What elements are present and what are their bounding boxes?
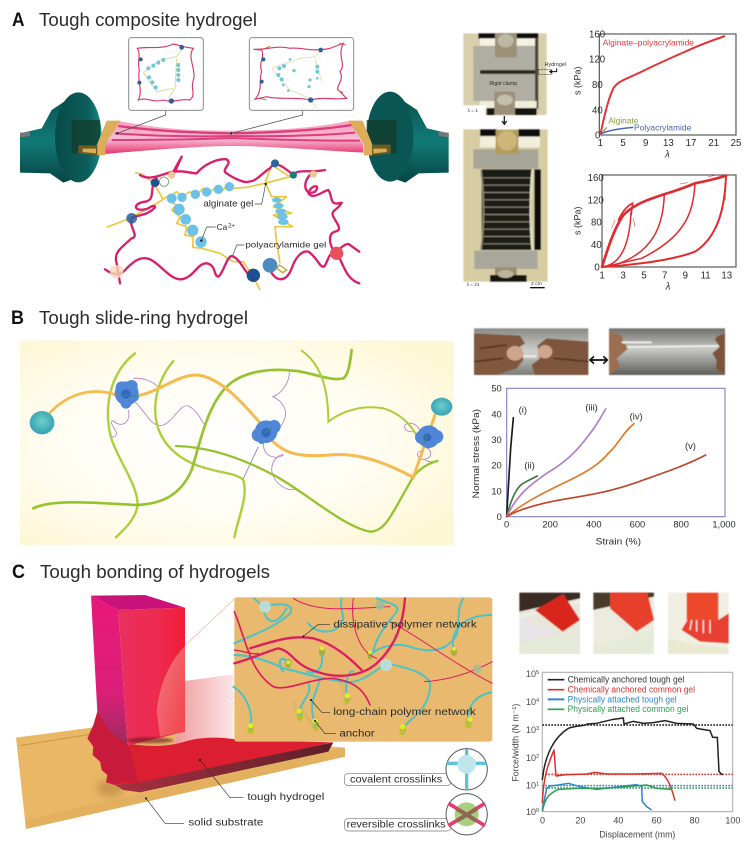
- axes labels: [572, 173, 732, 292]
- axes labels: 1,000: [712, 519, 736, 529]
- axes labels: Normal stress (kPa): [471, 409, 481, 498]
- axes labels: 10: [491, 486, 502, 496]
- thin purple chains: [109, 371, 437, 490]
- chart: force per width vs displacement: [510, 669, 740, 839]
- dotted plateau lines: [542, 725, 733, 788]
- curves: [507, 409, 706, 517]
- axes labels: 21: [708, 138, 719, 149]
- covalent crosslink blobs: [259, 600, 482, 674]
- label: long-chain polymer network: long-chain polymer network: [333, 707, 476, 718]
- sliding rings: [115, 380, 443, 448]
- label: polyacrylamide gel: polyacrylamide gel: [245, 239, 326, 249]
- axes labels: 5: [620, 138, 626, 149]
- label: anchor: [314, 720, 375, 739]
- axes labels: 80: [690, 816, 700, 826]
- axes labels: 120: [588, 195, 604, 206]
- heading: tough bonding of hydrogels: Tough bonding of hydrogels: [40, 561, 270, 582]
- icon: left grip: [20, 92, 102, 183]
- axes labels: 50: [491, 384, 502, 394]
- photo: stretched gel lambda=21: 2 cm: [531, 281, 542, 287]
- green polymer network: [33, 350, 437, 537]
- label: Ca2+: Ca: [217, 222, 228, 232]
- legend: covalent crosslinks: covalent crosslinks: [350, 775, 442, 786]
- arrow down: [502, 116, 507, 124]
- axes labels: 0: [594, 262, 600, 273]
- chart: stress vs stretch: [572, 30, 741, 160]
- axes labels: 2: [536, 754, 539, 760]
- chart: normal stress vs strain: [471, 384, 736, 546]
- label: alginate gel: [203, 183, 267, 209]
- axes labels: 30: [491, 435, 502, 445]
- axes labels: 20: [575, 816, 585, 826]
- legend: Physically attached tough gel: [568, 694, 677, 704]
- label: Ca2+: 2+: [228, 223, 235, 229]
- photo: stretched gel lambda=21: [463, 129, 548, 288]
- curve labels: (i): [519, 405, 527, 415]
- axes labels: 1: [598, 138, 603, 149]
- axes labels: 5: [641, 270, 647, 281]
- axes labels: 13: [663, 138, 674, 149]
- axes labels: 10: [526, 697, 536, 707]
- callouts and crosslink legends: [145, 749, 487, 835]
- end stoppers: [30, 398, 452, 434]
- axes labels: 9: [643, 138, 648, 149]
- axes labels: [471, 384, 736, 546]
- legend: Chemically anchored common gel: [568, 684, 695, 694]
- axes labels: 10: [526, 807, 536, 817]
- axes labels: 1: [536, 782, 539, 788]
- photo: unstretched gel lambda=1: [463, 33, 566, 115]
- photo: peel stage a: [519, 593, 580, 654]
- anchors: [247, 647, 472, 735]
- stretch photos: [471, 328, 736, 546]
- axes labels: 0: [540, 816, 545, 826]
- label: solid substrate: [145, 797, 264, 829]
- axes labels: 13: [721, 270, 732, 281]
- chart: stress vs stretch: Alginate–polyacrylamide: [603, 37, 694, 47]
- label: tough hydrogel: [199, 759, 324, 803]
- inset: stretched network: [249, 38, 354, 110]
- axes labels: 800: [673, 519, 689, 529]
- axes labels: 600: [630, 519, 645, 529]
- heading letter B: B: [11, 308, 24, 329]
- axes labels: s (kPa): [572, 67, 582, 95]
- panel: A tough composite hydrogel: [12, 9, 741, 292]
- axes labels: λ: [665, 281, 671, 292]
- axes labels: Strain (%): [596, 536, 641, 546]
- photo: stretched gel: [609, 328, 725, 375]
- axes labels: [572, 30, 741, 160]
- axes labels: 40: [592, 105, 603, 116]
- peeling illustration: [16, 595, 345, 829]
- panel: B tough slide-ring hydrogel: [11, 307, 736, 546]
- tough hydrogel layer on substrate: [100, 732, 333, 792]
- axes labels: 0: [536, 808, 539, 814]
- axes labels: 3: [536, 726, 539, 732]
- label: anchor: anchor: [339, 728, 375, 739]
- axes labels: 10: [526, 725, 536, 735]
- calcium ions: [167, 182, 289, 248]
- axes labels: 10: [526, 781, 536, 791]
- photo: unstretched gel lambda=1: Hydrogel: [545, 62, 566, 68]
- axes labels: 80: [592, 80, 603, 91]
- legend: reversible crosslinks: [344, 794, 487, 835]
- photo: peel stage c: [668, 593, 729, 654]
- photos: tensile test: [463, 30, 741, 292]
- axes labels: 4: [536, 698, 539, 704]
- heading letter C: C: [12, 562, 25, 583]
- axes labels: 5: [536, 670, 539, 676]
- stretching illustration: [20, 38, 449, 183]
- curve labels: (ii): [524, 461, 535, 471]
- curve labels: (v): [685, 441, 696, 451]
- axes labels: 160: [588, 173, 604, 184]
- photo: peel stage b: [593, 593, 654, 654]
- axes labels: 40: [613, 816, 623, 826]
- legend: reversible crosslinks: reversible crosslinks: [347, 820, 446, 831]
- curve labels: (iii): [585, 402, 598, 412]
- axes labels: 9: [683, 270, 688, 281]
- chart: stress vs stretch: Alginate: [608, 115, 639, 125]
- axes labels: s (kPa): [572, 207, 582, 235]
- icon: right grip: [367, 92, 449, 183]
- network diagram: [105, 157, 359, 290]
- axes labels: 400: [586, 519, 602, 529]
- axes labels: 10: [526, 753, 536, 763]
- axes labels: 40: [591, 240, 602, 251]
- curve labels: [519, 402, 696, 471]
- label: tough hydrogel: tough hydrogel: [247, 792, 324, 803]
- axes labels: 1: [599, 270, 605, 281]
- panel: C tough bonding of hydrogels: [12, 561, 740, 839]
- axes labels: 3: [620, 270, 626, 281]
- axes labels: 80: [591, 218, 602, 229]
- axes labels: 0: [497, 512, 502, 522]
- legend: covalent crosslinks: [344, 749, 487, 790]
- orange axle chain: [49, 375, 435, 477]
- legend: Chemically anchored tough gel: [568, 674, 684, 684]
- axes labels: λ: [664, 149, 670, 160]
- heading: tough composite hydrogel: Tough composite hydrogel: [39, 9, 257, 30]
- heading letter A: A: [12, 10, 25, 31]
- legend: Physically attached common gel: [568, 704, 688, 714]
- solid substrate: [16, 728, 345, 829]
- inset: unstretched network: [129, 38, 203, 110]
- heading: tough slide-ring hydrogel: Tough slide-ring hydrogel: [39, 307, 248, 328]
- anchor heads: [248, 646, 473, 729]
- axes labels: 160: [589, 30, 605, 41]
- background: [20, 341, 454, 545]
- label: dissipative polymer network: dissipative polymer network: [333, 620, 477, 631]
- contact shadow: [127, 737, 173, 743]
- axes labels: 20: [491, 461, 502, 471]
- magenta dissipative network: [234, 598, 492, 705]
- label: Ca2+: [200, 222, 235, 242]
- label: polyacrylamide gel: [233, 239, 326, 256]
- label: solid substrate: solid substrate: [188, 818, 264, 829]
- photo: unstretched gel lambda=1: λ = 1: [468, 108, 478, 113]
- photo: stretched gel lambda=21: λ = 21: [467, 282, 480, 287]
- curve labels: (iv): [630, 411, 643, 421]
- stretched hydrogel band: [105, 121, 363, 154]
- ragged fracture zone: [87, 712, 138, 785]
- axes labels: 11: [701, 270, 711, 281]
- axes labels: 7: [662, 270, 667, 281]
- axes labels: 200: [542, 519, 558, 529]
- slide-ring illustration: [20, 341, 454, 545]
- axes labels: 40: [491, 409, 502, 419]
- axes labels: 10: [526, 669, 536, 679]
- covalent crosslink balls: [110, 159, 343, 282]
- axes labels: 0: [595, 131, 600, 142]
- axes labels: 60: [652, 816, 662, 826]
- label: long-chain polymer network: [310, 699, 476, 718]
- gel block: [91, 595, 185, 746]
- leader lines to insets: [116, 111, 303, 134]
- axes labels: 100: [725, 816, 740, 826]
- chart: cyclic loading: [572, 173, 736, 292]
- gold clamps: [78, 121, 391, 155]
- axes labels: Displacement (mm): [599, 829, 675, 839]
- axes labels: 17: [686, 138, 696, 149]
- cyan long-chain network: [233, 598, 491, 729]
- axes labels: 0: [504, 519, 509, 529]
- peel photos and chart: [510, 593, 740, 839]
- axes labels: 120: [589, 55, 605, 66]
- inset: polymer network detail: [233, 597, 492, 742]
- photo: unstretched gel lambda=1: Rigid clamp: [489, 81, 517, 87]
- faded rear of gel: [173, 674, 233, 747]
- zoom wedge on gel block: [157, 598, 235, 737]
- data curves: [542, 718, 723, 812]
- axes labels: Force/width (N m⁻¹): [510, 704, 520, 782]
- label: alginate gel: alginate gel: [203, 199, 253, 209]
- photo: hands holding gel: [474, 328, 588, 375]
- legend: [548, 674, 695, 714]
- axes labels: [510, 669, 740, 839]
- axes labels: 25: [731, 138, 741, 149]
- label: dissipative polymer network: [302, 620, 477, 637]
- polyacrylamide chains: [105, 157, 359, 283]
- double arrow: [590, 356, 607, 364]
- chart: stress vs stretch: Polyacrylamide: [634, 123, 692, 133]
- alginate chains: [107, 165, 293, 290]
